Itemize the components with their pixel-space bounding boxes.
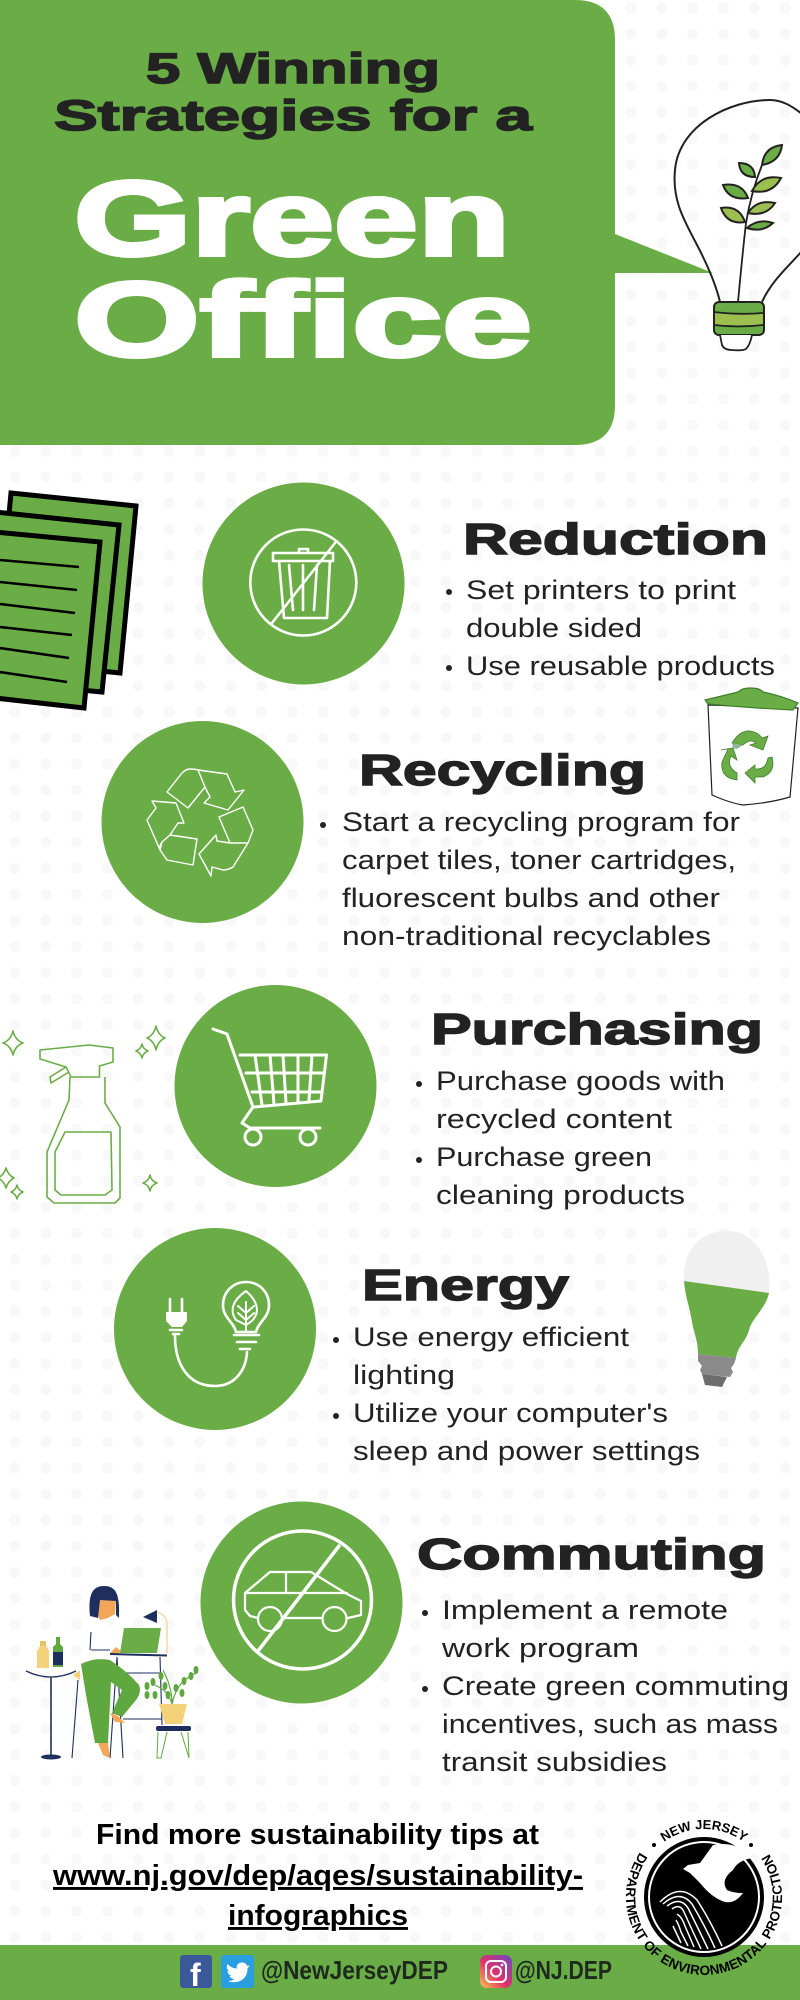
bullet list: commuting [422,1595,789,1777]
heading: Reduction: Reduction [463,515,768,564]
footer bar [0,1945,800,2000]
waves [660,1891,722,1949]
panel: recycling [102,688,798,951]
bullet list: commuting: Implement a remote [442,1595,728,1625]
icon circle: plug and leaf bulb [114,1228,316,1430]
bullet list: energy: Use energy efficient [353,1322,630,1352]
bullet list: commuting: work program [441,1633,639,1663]
footer call to action: infographics [228,1900,408,1932]
title: Green Office [74,160,532,379]
footer call to action: www.nj.gov/dep/aqes/sustainability- [52,1860,583,1892]
bullet list: recycling: Start a recycling program for [342,807,740,837]
heading: Commuting: Commuting [417,1530,766,1579]
bullet list: purchasing [416,1066,725,1210]
social: facebook icon [180,1955,212,1993]
title: 5 Winning Strategies for a: Strategies for a [54,92,534,140]
bullet list: commuting: transit subsidies [442,1747,667,1777]
bullet list: reduction [446,575,775,681]
panel: commuting [26,1502,789,1777]
icon: recycle bin [705,688,798,805]
illustration: woman working at laptop [26,1586,198,1760]
icon: spray bottle with sparkles [0,1026,165,1203]
bullet list: energy: lighting [353,1360,455,1390]
logo: NJ Department of Environmental Protection seal: DEPARTMENT OF ENVIRONMENTAL PROTECTION [626,1852,782,1976]
bullet list: energy: Utilize your computer's [353,1398,668,1428]
bullet list: reduction: double sided [466,613,642,643]
heading: Purchasing: Purchasing [431,1005,763,1054]
side table with bottles [26,1637,76,1760]
panel: energy [114,1228,769,1466]
footer call to action: Find more sustainability tips at [96,1819,539,1851]
bullet list: commuting: Create green commuting [442,1671,789,1701]
heading: Recycling: Recycling [359,746,646,795]
title: Green Office: Office [74,261,532,379]
icon circle: recycle symbol [102,721,304,923]
bullet list: purchasing: cleaning products [436,1180,685,1210]
heading: Energy: Energy [362,1261,570,1310]
bullet list: recycling: carpet tiles, toner cartridges, [342,845,736,875]
social: instagram icon [480,1955,512,1988]
bullet list: reduction: Use reusable products [466,651,775,681]
bullet list: energy: sleep and power settings [353,1436,700,1466]
bullet list: energy [333,1322,700,1466]
footer call to action [52,1819,583,1932]
bullet list: purchasing: Purchase goods with [436,1066,725,1096]
dove [683,1844,753,1902]
icon circle: no car [200,1502,402,1704]
bullet list: recycling [320,807,740,951]
bullet list: reduction: Set printers to print [466,575,737,605]
title: 5 Winning Strategies for a [54,45,534,140]
logo: NJ Department of Environmental Protection seal: NEW JERSEY [660,1820,749,1842]
bullet list: commuting: incentives, such as mass [442,1709,778,1739]
header panel [0,0,713,445]
icon: light bulb with plant [675,100,800,350]
bullet list: recycling: fluorescent bulbs and other [342,883,720,913]
social: facebook icon: f [190,1957,201,1993]
title: 5 Winning Strategies for a: 5 Winning [146,45,440,93]
social: twitter icon [221,1955,254,1988]
bullet list: purchasing: recycled content [436,1104,673,1134]
icon: paper stack [0,493,136,708]
icon circle: no trash [202,482,404,684]
panel: reduction [0,482,775,708]
social: instagram handle: @NJ.DEP [515,1955,612,1985]
bullet list: purchasing: Purchase green [436,1142,652,1172]
potted plant on stool [144,1666,198,1758]
panel: purchasing [0,985,763,1210]
social: facebook and twitter handle: @NewJerseyDEP [261,1955,448,1985]
icon circle: shopping cart [174,985,376,1187]
icon: green LED bulb [684,1231,769,1387]
bullet list: recycling: non-traditional recyclables [342,921,711,951]
title: Green Office: Green [74,160,510,278]
